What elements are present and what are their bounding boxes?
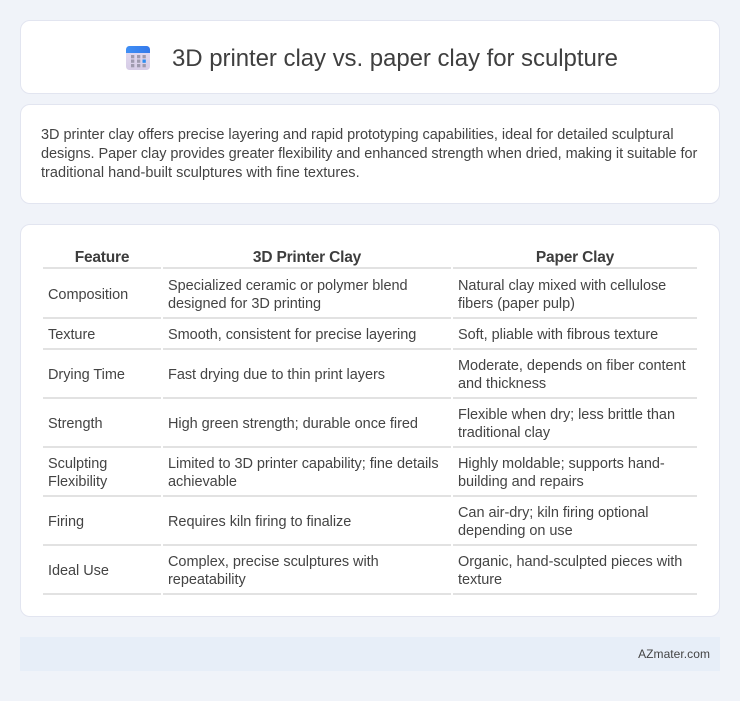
row: Ideal Use: Organic, hand-sculpted pieces with [458,554,682,570]
table header: Paper Clay [536,249,614,266]
panel: comparison table [20,224,720,617]
row: Strength: traditional clay [458,425,550,441]
text block: summary: 3D printer clay offers precise layering and rapid prototyping capabilities, ideal for detailed sculptural [41,127,674,143]
row: Sculpting Flexibility: achievable [168,474,237,490]
row: Composition: Specialized ceramic or polymer blend [168,278,408,294]
row: Ideal Use: Ideal Use [48,563,109,579]
row: Strength: Strength [48,416,102,432]
row: Drying Time: Moderate, depends on fiber content [458,358,686,374]
row: Strength: Flexible when dry; less brittle than [458,407,675,423]
row: Sculpting Flexibility: Highly moldable; supports hand- [458,456,665,472]
text block: summary: traditional hand-built sculptures with fine textures. [41,165,360,181]
row: Drying Time: Fast drying due to thin print layers [168,367,385,383]
row: Composition: designed for 3D printing [168,296,321,312]
footer credit: AZmater.com [638,647,710,661]
row: Composition: fibers (paper pulp) [458,296,575,312]
icon: calendar grid [126,46,150,70]
row: Firing: depending on use [458,523,573,539]
footer bar [20,637,720,671]
row: Sculpting Flexibility: Limited to 3D printer capability; fine details [168,456,439,472]
row: Texture: Soft, pliable with fibrous texture [458,327,658,343]
row: Drying Time [43,358,697,399]
row: Firing: Can air-dry; kiln firing optional [458,505,648,521]
table header: Feature [75,249,129,266]
row: Strength: High green strength; durable once fired [168,416,418,432]
row: Firing: Requires kiln firing to finalize [168,514,351,530]
row: Drying Time: Drying Time [48,367,125,383]
row: Sculpting Flexibility: building and repairs [458,474,584,490]
row: Texture: Texture [48,327,95,343]
row: Ideal Use: texture [458,572,502,588]
row: Sculpting Flexibility: Flexibility [48,474,107,490]
table header [43,249,697,269]
panel: title card [20,20,720,94]
row: Composition [43,278,697,319]
row: Firing [43,505,697,546]
text block: summary: designs. Paper clay provides greater flexibility and enhanced strength when dried, making it suitable for [41,146,697,162]
row: Composition: Composition [48,287,128,303]
row: Firing: Firing [48,514,84,530]
row: Sculpting Flexibility [43,456,697,497]
table header: 3D Printer Clay [253,249,361,266]
row: Drying Time: and thickness [458,376,546,392]
text block: summary [41,127,698,181]
row: Sculpting Flexibility: Sculpting [48,456,107,472]
row: Ideal Use: Complex, precise sculptures with [168,554,379,570]
row: Strength [43,407,697,448]
panel: summary text [20,104,720,204]
row: Composition: Natural clay mixed with cellulose [458,278,666,294]
title: 3D printer clay vs. paper clay for sculpture [172,45,618,72]
row: Texture: Smooth, consistent for precise layering [168,327,416,343]
row: Ideal Use: repeatability [168,572,246,588]
row: Texture [43,327,697,350]
